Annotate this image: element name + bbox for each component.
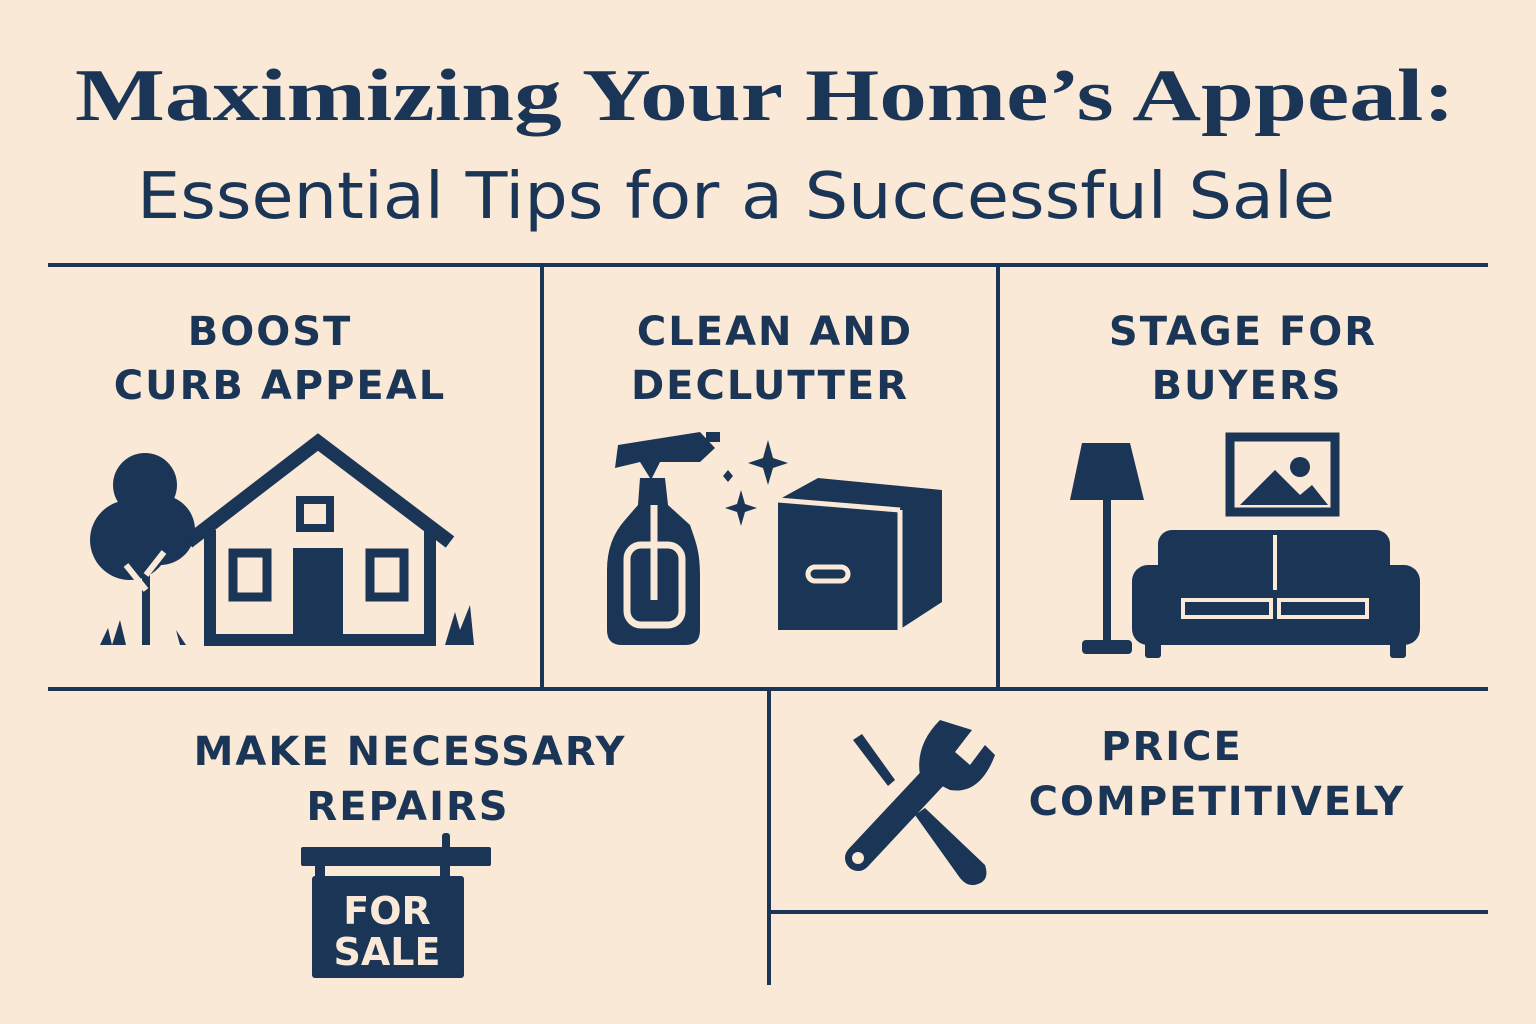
heading: clean and declutter: CLEAN AND <box>637 309 913 355</box>
heading: boost curb appeal: CURB APPEAL <box>114 363 446 409</box>
icon: house and tree <box>90 442 474 645</box>
heading: stage for buyers: STAGE FOR <box>1109 309 1377 355</box>
heading: make necessary repairs: MAKE NECESSARY <box>194 729 626 775</box>
icon: for sale sign: SALE <box>334 930 440 974</box>
heading: price competitively: PRICE <box>1101 724 1243 770</box>
heading: boost curb appeal: BOOST <box>188 309 352 355</box>
panel: boost curb appeal <box>90 309 474 645</box>
icon: for sale sign: FOR <box>343 889 431 933</box>
heading: make necessary repairs: REPAIRS <box>306 784 510 830</box>
heading: boost curb appeal <box>114 309 446 409</box>
icon: wrench and screwdriver <box>852 720 995 885</box>
panel: make necessary repairs <box>194 729 626 978</box>
panel: stage for buyers <box>1070 309 1420 658</box>
heading: clean and declutter: DECLUTTER <box>631 363 909 409</box>
heading: make necessary repairs <box>194 729 626 830</box>
heading: price competitively <box>1029 724 1405 825</box>
panel: clean and declutter <box>607 309 942 645</box>
title: Maximizing Your Home’s Appeal: <box>75 55 1455 137</box>
heading: price competitively: COMPETITIVELY <box>1029 779 1405 825</box>
heading: clean and declutter <box>631 309 913 409</box>
heading: stage for buyers <box>1109 309 1377 409</box>
icon: lamp, picture and sofa <box>1070 437 1420 658</box>
heading: stage for buyers: BUYERS <box>1152 363 1342 409</box>
icon: for sale sign <box>301 833 491 978</box>
icon: spray bottle <box>607 432 942 645</box>
panel: price competitively <box>852 720 1405 885</box>
subtitle: Essential Tips for a Successful Sale <box>137 160 1335 234</box>
